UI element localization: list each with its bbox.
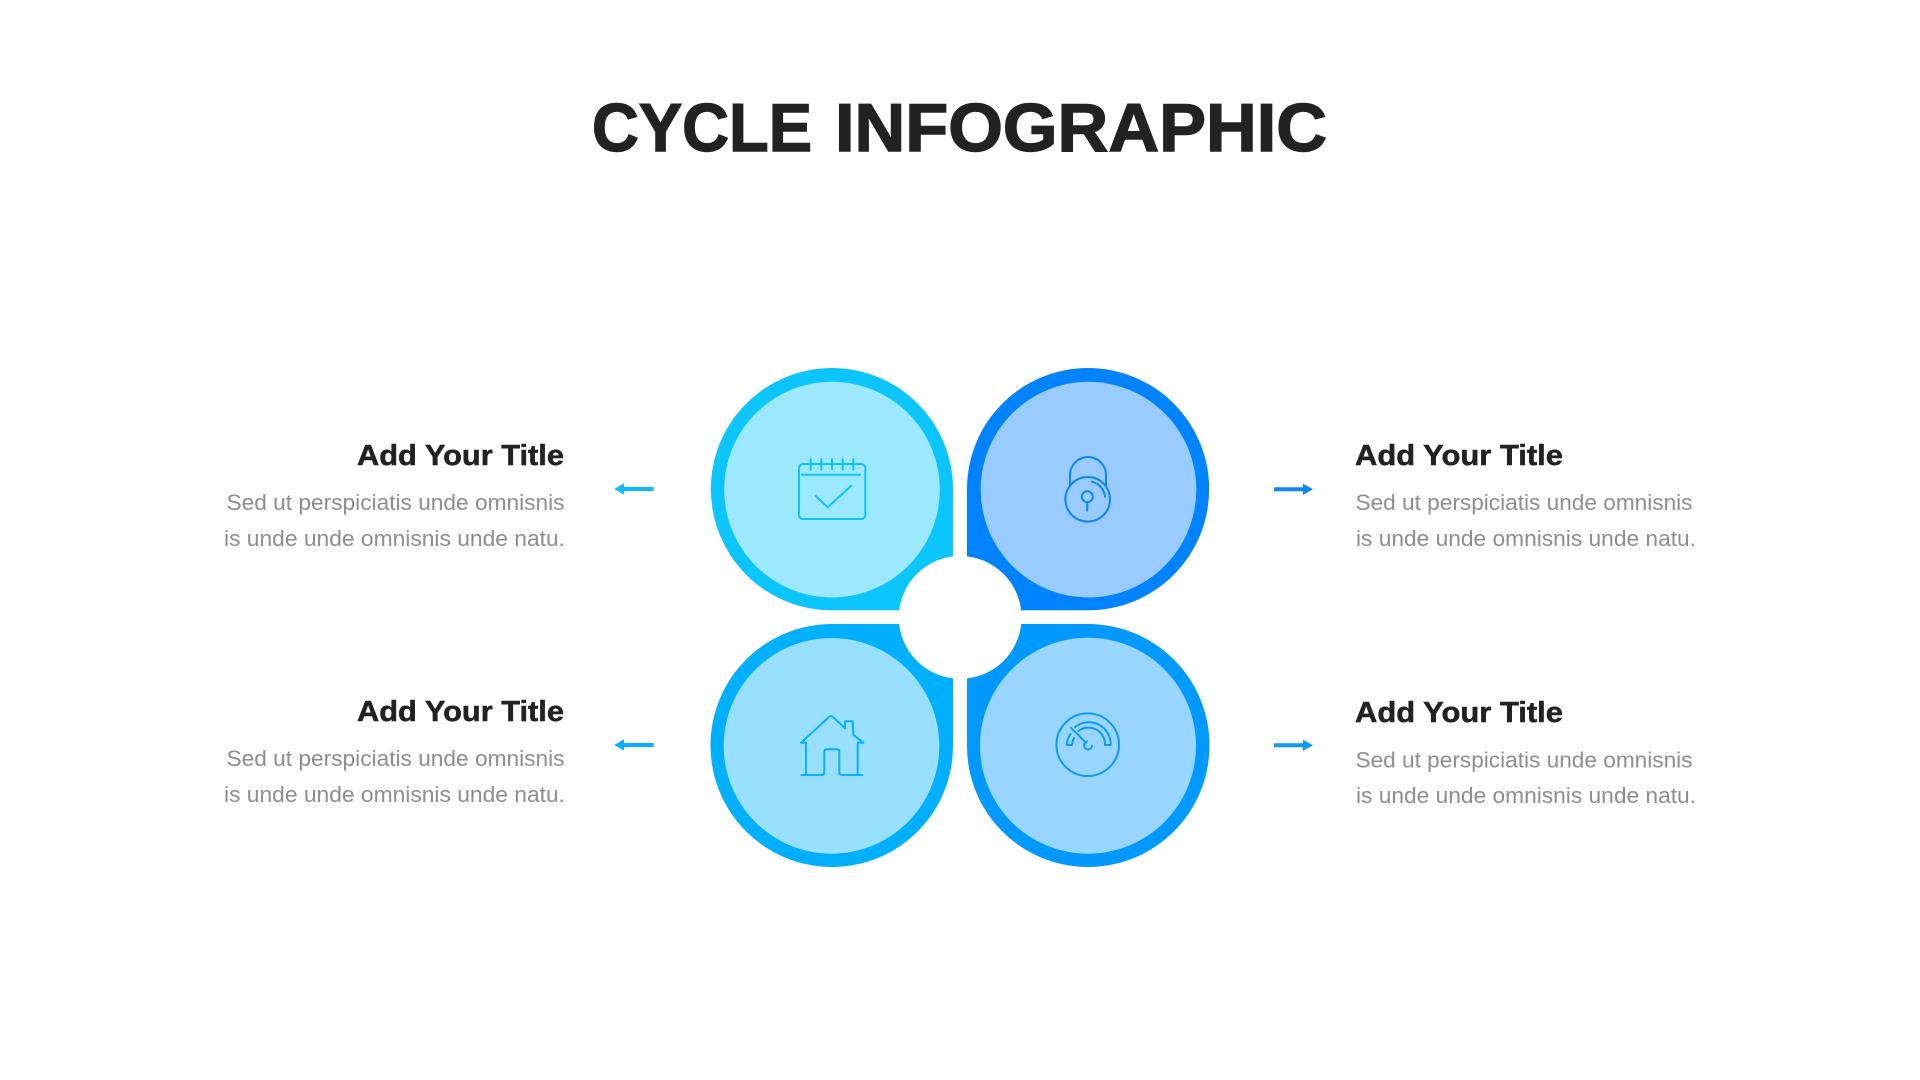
text block: bottom left [224, 696, 565, 807]
arrow: bottom right [1274, 740, 1313, 751]
text block: bottom right: Add Your Title [1355, 697, 1563, 729]
center white circle [899, 556, 1022, 679]
icon: padlock [1065, 457, 1110, 522]
title: CYCLE [592, 90, 812, 166]
arrow: top left [614, 483, 654, 495]
text block: bottom right: is unde unde omnisnis unde natu. [1356, 783, 1696, 808]
petal: bottom right [967, 624, 1210, 867]
text block: top right: is unde unde omnisnis unde natu. [1356, 526, 1696, 551]
icon: house [801, 716, 863, 775]
text block: top left: Sed ut perspiciatis unde omnisnis [226, 490, 564, 515]
text block: top left: Add Your Title [357, 440, 564, 472]
text block: top left [224, 440, 565, 551]
title: INFOGRAPHIC [835, 90, 1327, 166]
arrow: top right [1274, 484, 1313, 495]
petal: bottom left [710, 624, 953, 867]
icon: gauge [1056, 713, 1119, 776]
text block: bottom left: Sed ut perspiciatis unde omnisnis [226, 746, 564, 771]
petal: top left [711, 368, 953, 610]
text block: top left: is unde unde omnisnis unde natu. [224, 526, 565, 551]
text block: top right: Add Your Title [1355, 440, 1563, 472]
text block: bottom right: Sed ut perspiciatis unde omnisnis [1356, 747, 1692, 772]
text block: bottom left: Add Your Title [357, 696, 564, 728]
text block: bottom left: is unde unde omnisnis unde natu. [224, 782, 565, 807]
cycle diagram [710, 368, 1210, 867]
arrow: bottom left [614, 739, 654, 751]
text block: bottom right [1355, 697, 1696, 808]
petal: top right [967, 368, 1209, 610]
text block: top right: Sed ut perspiciatis unde omnisnis [1356, 490, 1692, 515]
icon: calendar with check [799, 459, 865, 519]
text block: top right [1355, 440, 1696, 551]
